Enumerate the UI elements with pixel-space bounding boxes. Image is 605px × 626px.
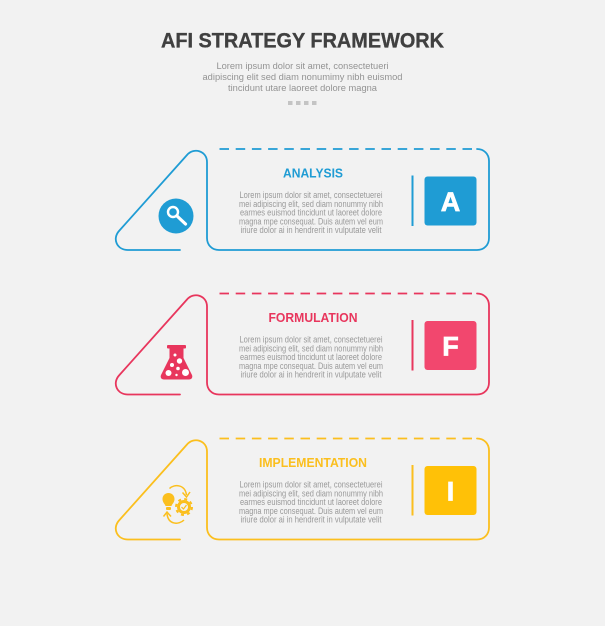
subtitle: Lorem ipsum dolor sit amet, consectetueri: [216, 60, 388, 71]
subtitle: tincidunt utare laoreet dolore magna: [228, 82, 378, 93]
subtitle: [202, 60, 402, 93]
body text: iriure dolor ai in hendrerit in vulputate velit: [240, 514, 382, 524]
panel: formulation: [116, 294, 489, 394]
divider: [412, 320, 414, 370]
body text: magna mpe consequat. Duis autem vel eum: [239, 506, 383, 516]
body text: earmes euismod tincidunt ut laoreet dolore: [240, 352, 382, 362]
letter badge: A: [441, 187, 460, 217]
letter badge: [424, 466, 476, 515]
body text: iriure dolor ai in hendrerit in vulputate velit: [240, 225, 382, 235]
panel outline: [116, 149, 489, 250]
panel: implementation: [116, 438, 489, 540]
icon: bulb and gear cycle: [162, 486, 192, 523]
body text: earmes euismod tincidunt ut laoreet dolore: [240, 208, 382, 218]
body text: Lorem ipsum dolor sit amet, consectetuerei: [240, 480, 383, 490]
icon: flask: [161, 345, 192, 380]
heading: ANALYSIS: [283, 166, 343, 180]
pagination dots: [288, 101, 316, 105]
heading: IMPLEMENTATION: [259, 456, 367, 470]
letter badge: I: [447, 476, 454, 506]
letter badge: [424, 176, 476, 226]
subtitle: adipiscing elit sed diam nonumimy nibh euismod: [202, 71, 402, 82]
body text: Lorem ipsum dolor sit amet, consectetuerei: [240, 334, 383, 344]
body text: [239, 480, 383, 524]
body text: Lorem ipsum dolor sit amet, consectetuerei: [240, 190, 383, 200]
body text: mei adipiscing elit, sed diam nonummy nibh: [239, 199, 383, 209]
body text: iriure dolor ai in hendrerit in vulputate velit: [240, 370, 382, 380]
body text: mei adipiscing elit, sed diam nonummy nibh: [239, 488, 383, 498]
divider: [412, 465, 414, 516]
title: AFI STRATEGY FRAMEWORK: [161, 30, 444, 52]
body text: [239, 334, 383, 380]
panel outline: [116, 294, 489, 394]
body text: earmes euismod tincidunt ut laoreet dolore: [240, 497, 382, 507]
divider: [412, 176, 414, 226]
heading: FORMULATION: [268, 311, 358, 325]
icon: magnifying glass: [158, 198, 194, 234]
panel outline: [116, 438, 489, 540]
body text: magna mpe consequat. Duis autem vel eum: [239, 361, 383, 371]
letter badge: [424, 321, 476, 370]
letter badge: F: [442, 332, 459, 362]
panel: analysis: [116, 149, 489, 250]
body text: magna mpe consequat. Duis autem vel eum: [239, 216, 383, 226]
body text: [239, 190, 383, 235]
body text: mei adipiscing elit, sed diam nonummy nibh: [239, 344, 383, 354]
